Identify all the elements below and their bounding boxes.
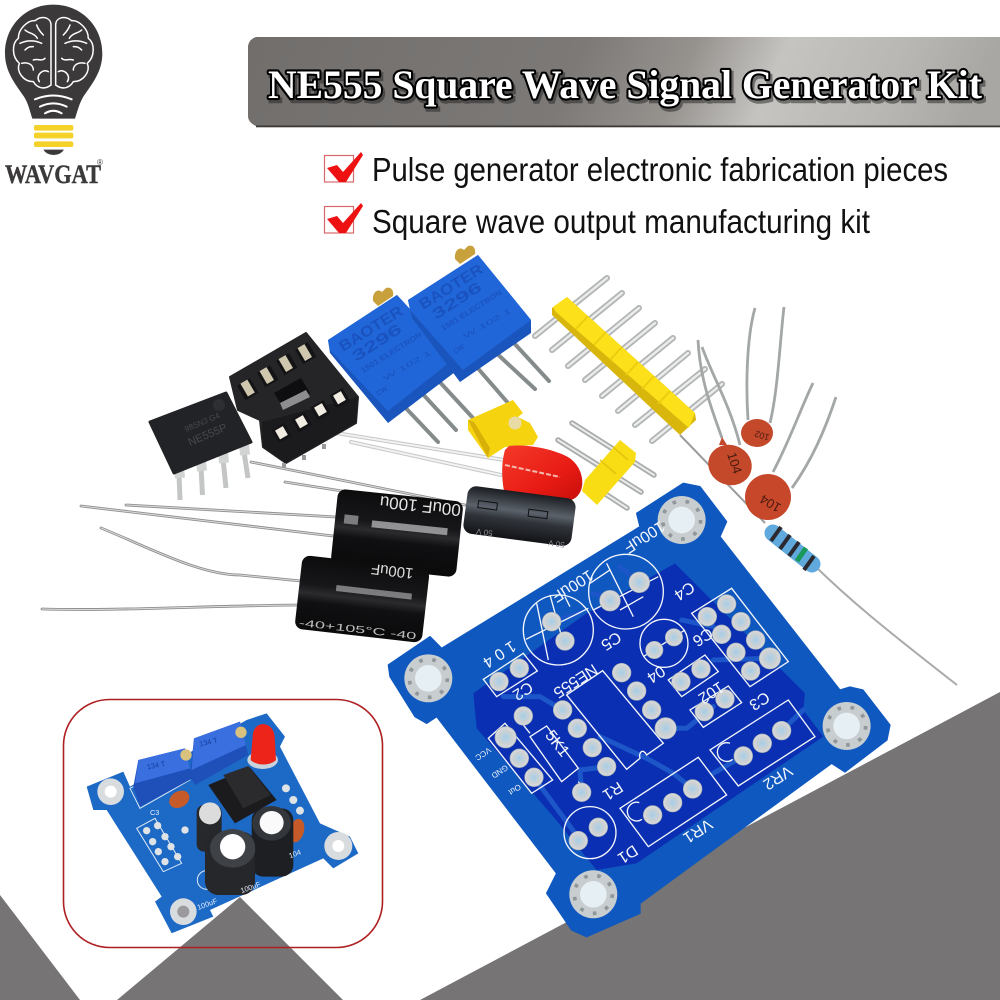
silkscreen outlines xyxy=(483,554,815,859)
component: ceramic capacitor 104 right: 104 xyxy=(757,492,784,515)
component: red LED xyxy=(502,445,582,502)
assembled board image xyxy=(87,713,358,933)
silkscreen labels: VR1 xyxy=(680,815,715,846)
component: blue trimmer potentiometer 2: 3296 xyxy=(429,279,485,323)
mini labels: 100uF xyxy=(239,879,262,895)
title banner xyxy=(248,37,1000,127)
icon: check box 2 xyxy=(324,203,363,233)
mini board xyxy=(87,713,358,933)
mini labels: 100uF xyxy=(196,896,219,912)
banner bottom edge xyxy=(256,126,1000,127)
mini silkscreen xyxy=(130,763,216,889)
icon: check box 1 xyxy=(324,152,363,182)
silkscreen labels: C3 xyxy=(746,688,772,713)
component: NE555 IC chip xyxy=(150,393,251,500)
mini ceramic capacitors xyxy=(166,787,193,812)
component: long yellow pin header xyxy=(535,278,722,441)
mounting holes xyxy=(404,496,871,918)
component: blue trimmer potentiometer 1 xyxy=(328,288,455,423)
gray background triangle behind inset xyxy=(117,897,343,1000)
feature text 2: Square wave output manufacturing kit xyxy=(372,203,870,240)
component: NE555 IC chip: NE555P xyxy=(186,422,229,449)
silkscreen labels: VR2 xyxy=(760,761,795,793)
traces xyxy=(503,567,803,840)
mini pot labels: 134 T xyxy=(146,759,167,771)
component: large electrolytic capacitor B: 100uF xyxy=(370,560,414,582)
silkscreen labels: 100uF xyxy=(549,566,596,605)
component: NE555 IC chip: 98SN3 G4 xyxy=(183,411,222,434)
icon: light bulb with brain xyxy=(5,5,102,155)
mini pot labels: 134 T xyxy=(198,735,219,749)
logo: WAVGAT bulb xyxy=(5,5,103,189)
component: blue trimmer potentiometer 1: BAOTER xyxy=(336,303,406,355)
mini labels: C3 xyxy=(150,808,159,817)
component: blue trimmer potentiometer 1: 3296 xyxy=(349,321,405,365)
silkscreen labels: GND xyxy=(490,763,510,780)
silkscreen labels: VCC xyxy=(473,745,493,762)
inset frame xyxy=(64,700,382,948)
mini LED xyxy=(247,724,278,769)
mini electrolytic capacitors xyxy=(197,802,293,895)
component: trimmer potentiometer leads xyxy=(401,342,549,442)
component: ceramic capacitor 104 left: 104 xyxy=(724,450,745,476)
component: IC socket xyxy=(230,333,358,468)
mini mounting holes xyxy=(97,778,352,925)
component: small electrolytic capacitor xyxy=(462,485,577,550)
silkscreen labels: C2 xyxy=(509,678,536,703)
silkscreen labels: 100uF xyxy=(620,517,668,556)
silkscreen labels: C6 xyxy=(689,624,716,649)
component: yellow jumper cap xyxy=(468,400,538,458)
silkscreen labels xyxy=(473,517,795,866)
component: ceramic capacitor 104 right xyxy=(745,383,836,520)
component: large electrolytic capacitor A xyxy=(330,488,464,577)
component: blue trimmer potentiometer 2: W 102 1 xyxy=(462,308,513,341)
silkscreen labels: 1 0 4 xyxy=(479,637,519,671)
banner bar xyxy=(248,37,1000,127)
silkscreen labels: D1 xyxy=(614,841,641,866)
component: blue trimmer potentiometer 1: W 102 1 xyxy=(382,350,433,383)
mini pot labels xyxy=(146,735,219,771)
silkscreen labels: 102 xyxy=(695,678,727,707)
component: resistor with lead xyxy=(680,435,957,685)
component: blue trimmer potentiometer 2: CW xyxy=(452,343,466,356)
silkscreen labels: 04 xyxy=(644,662,668,686)
component leads: capacitors and LED xyxy=(42,433,504,609)
brand name: WAVGAT xyxy=(5,160,101,189)
mini socket and chip xyxy=(208,767,277,823)
mini potentiometers xyxy=(133,722,248,807)
silkscreen labels: Out xyxy=(506,782,523,797)
gray background wedge bottom right xyxy=(420,692,1000,1000)
component: blue trimmer potentiometer 1: CW xyxy=(375,385,389,398)
gray background wedge bottom left xyxy=(0,895,80,1000)
mini labels xyxy=(150,808,302,912)
component: large electrolytic capacitor B: -40+105°C -40 xyxy=(298,618,418,642)
silkscreen labels: C4 xyxy=(671,578,697,603)
silkscreen labels: NE555 xyxy=(550,660,600,701)
silkscreen labels: C5 xyxy=(597,628,624,653)
silkscreen labels: 5K1 xyxy=(541,727,572,760)
inner copper pour xyxy=(473,563,823,870)
silkscreen labels: R1 xyxy=(599,778,626,803)
component: blue trimmer potentiometer 2: BAOTER xyxy=(416,261,486,313)
mini pads xyxy=(143,784,304,865)
solder pads xyxy=(490,572,791,850)
component: small electrolytic capacitor: 50 V xyxy=(475,526,493,538)
title shadow: NE555 Square Wave Signal Generator Kit xyxy=(270,65,985,110)
component: blue trimmer potentiometer 2 xyxy=(408,246,531,382)
component: large electrolytic capacitor B xyxy=(294,552,430,643)
component: small electrolytic capacitor: 50 V xyxy=(547,538,565,549)
PCB bare board xyxy=(388,483,890,937)
component: ceramic capacitor 104 left xyxy=(698,340,758,491)
component: short yellow pin header xyxy=(558,423,654,508)
mini potentiometer screws xyxy=(180,727,247,761)
component: blue trimmer potentiometer 2: 1501 ELECTRON xyxy=(439,288,503,333)
component: ceramic capacitor 102 xyxy=(741,307,784,447)
title text: NE555 Square Wave Signal Generator Kit xyxy=(268,62,983,107)
registered mark: ® xyxy=(97,158,103,167)
component: blue trimmer potentiometer 1: 1501 ELECTRON xyxy=(359,330,423,375)
mini labels: 104 xyxy=(288,848,302,860)
component: ceramic capacitor 102: 102 xyxy=(753,428,771,443)
board outline xyxy=(388,483,890,937)
inset: assembled board callout xyxy=(64,700,382,948)
component: large electrolytic capacitor A: 00uF 100u xyxy=(379,492,462,519)
feature list xyxy=(324,151,948,240)
